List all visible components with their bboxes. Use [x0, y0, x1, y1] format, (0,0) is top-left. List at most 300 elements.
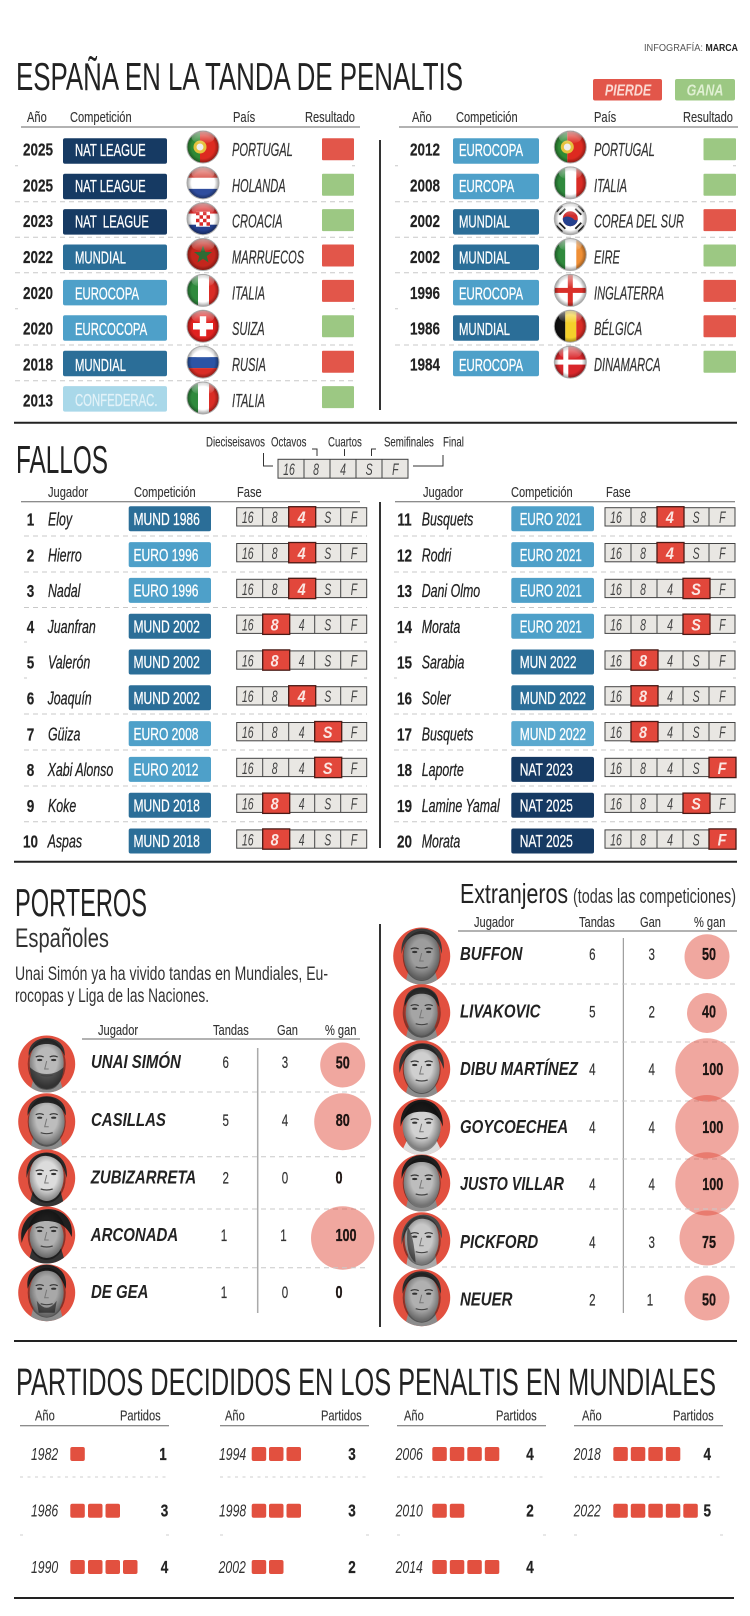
row: 2025 Portugal: [23, 131, 354, 164]
table header: Partidos: [120, 1407, 161, 1424]
row 2 Hierro: 2: [27, 547, 34, 566]
row 12 Rodri: EURO 2021: [520, 545, 582, 566]
row 11 Busquets: EURO 2021: [520, 510, 582, 530]
row: Zubizarreta: [18, 1150, 343, 1207]
row: Livakovic: 5: [589, 1004, 596, 1022]
row 7 Güiza: 7: [27, 726, 34, 745]
row 7 Güiza: Güiza: [48, 725, 81, 745]
phase key: 4: [340, 459, 346, 478]
row 2010: 2010: [395, 1501, 423, 1521]
row 4 Juanfran: MUND 2002: [134, 617, 200, 637]
row 3 Nadal: F: [351, 579, 358, 598]
row 12 Rodri: F: [719, 543, 727, 563]
row 18 Laporte: [397, 757, 736, 782]
row 1 Eloy: F: [351, 508, 358, 527]
credit: [644, 42, 738, 54]
row: Justo Villar: 100: [702, 1175, 723, 1195]
row 15 Sarabia: 15: [397, 654, 412, 673]
row 20 Morata: 8: [640, 830, 646, 849]
row 2 Hierro: Hierro: [48, 546, 82, 566]
row 16 Soler: 16: [397, 690, 412, 709]
row: Livakovic: [393, 984, 727, 1042]
row 9 Koke: [27, 793, 367, 818]
table header: Año: [582, 1407, 602, 1424]
table header: Resultado: [305, 108, 355, 125]
row: 2012 Portugal: [410, 131, 736, 164]
row: 2020 Italia: ITALIA: [232, 284, 265, 304]
row 4 Juanfran: F: [351, 615, 358, 634]
row 15 Sarabia: Sarabia: [422, 653, 465, 673]
row: Casillas: 5: [222, 1112, 229, 1131]
row: 2002 Eire: MUNDIAL: [459, 248, 510, 268]
row 6 Joaquín: 4: [297, 688, 306, 707]
row: 1996 Inglaterra: [410, 274, 736, 306]
table header: [20, 1407, 169, 1426]
phase key: [206, 434, 464, 478]
row 8 Xabi Alonso: 8: [27, 761, 34, 781]
row 16 Soler: 4: [667, 687, 673, 706]
row 10 Aspas: 4: [299, 830, 305, 849]
row 11 Busquets: F: [719, 508, 727, 527]
row 2 Hierro: 16: [242, 543, 254, 563]
row: 2002 Eire: EIRE: [594, 248, 621, 268]
row: Buffon: 6: [589, 946, 596, 965]
row: Arconada: 100: [336, 1226, 356, 1246]
row 5 Valerón: 4: [299, 651, 305, 670]
table header: Partidos: [321, 1407, 362, 1424]
row 2018: 4: [704, 1445, 711, 1465]
row 1 Eloy: 8: [272, 508, 278, 527]
row: Casillas: CASILLAS: [91, 1110, 167, 1130]
row: Casillas: 80: [336, 1111, 350, 1131]
row 2 Hierro: F: [351, 543, 358, 563]
row: 2023 Croacia: [23, 203, 354, 235]
row: 1984 Dinamarca: 1984: [410, 356, 440, 375]
row 6 Joaquín: MUND 2002: [134, 689, 200, 709]
row 15 Sarabia: F: [719, 651, 727, 670]
heading: Porteros: PORTEROS: [15, 882, 147, 925]
row 4 Juanfran: 4: [27, 618, 34, 637]
row 10 Aspas: F: [351, 830, 358, 849]
row: Unai Simón: 3: [282, 1054, 288, 1073]
row 10 Aspas: [23, 828, 367, 854]
row 7 Güiza: S: [323, 724, 333, 742]
row 16 Soler: S: [693, 687, 700, 706]
row: Justo Villar: JUSTO VILLAR: [460, 1173, 564, 1194]
table header: Año: [412, 108, 432, 125]
table header: Año: [27, 108, 47, 125]
row: Pickford: PICKFORD: [460, 1232, 538, 1252]
row: 1986 Bélgica: BÉLGICA: [594, 319, 642, 340]
row: Buffon: 3: [648, 946, 655, 965]
phase key: 16: [283, 459, 295, 478]
row 18 Laporte: S: [693, 758, 700, 777]
row: 2013 Italia: 2013: [23, 392, 53, 411]
phase key: 8: [313, 459, 319, 478]
row: 2020 Suiza: 2020: [23, 320, 53, 339]
table header: Competición: [511, 483, 573, 500]
row 14 Morata: S: [691, 617, 701, 635]
row: 2002 Eire: 2002: [410, 248, 440, 268]
row: Goycoechea: GOYCOECHEA: [460, 1117, 568, 1137]
row 10 Aspas: Aspas: [47, 832, 82, 852]
row: 2008 Italia: ITALIA: [594, 176, 627, 197]
row 11 Busquets: 4: [665, 509, 674, 528]
row 2010: [395, 1501, 534, 1521]
text block: Unai Simón: Unai Simón ya ha vivido tandas en Mundiales, Eu-: [15, 964, 328, 985]
phase key: Octavos: [271, 434, 306, 450]
row 2 Hierro: [27, 542, 367, 567]
row 17 Busquets: Busquets: [422, 725, 473, 745]
row 7 Güiza: 16: [242, 722, 254, 742]
row: 2002 Corea del Sur: [410, 203, 736, 235]
row 1998: [219, 1501, 356, 1521]
table header: Fase: [606, 483, 631, 500]
row 6 Joaquín: 8: [272, 687, 278, 706]
row 3 Nadal: 4: [297, 581, 306, 599]
row 2002: 2: [348, 1558, 356, 1578]
row: 2008 Italia: [410, 167, 736, 199]
row 8 Xabi Alonso: 16: [242, 758, 254, 777]
row 1990: [31, 1558, 168, 1578]
row: Livakovic: LIVAKOVIC: [460, 1001, 541, 1022]
row 15 Sarabia: MUN 2022: [520, 653, 576, 673]
row: 1986 Bélgica: MUNDIAL: [459, 320, 510, 340]
table header: Tandas: [579, 913, 615, 930]
row 2022: 5: [704, 1502, 711, 1521]
row 9 Koke: Koke: [48, 797, 76, 817]
row 7 Güiza: F: [351, 722, 358, 742]
row: 1996 Inglaterra: EUROCOPA: [459, 284, 523, 304]
row 1 Eloy: Eloy: [48, 510, 73, 530]
row 14 Morata: F: [719, 615, 727, 634]
row: 2025 Holanda: HOLANDA: [232, 176, 286, 197]
row 4 Juanfran: 8: [271, 617, 279, 635]
row: 2020 Italia: 2020: [23, 284, 53, 303]
credit: MARCA: [705, 42, 738, 54]
row 9 Koke: 9: [27, 797, 34, 816]
row 1 Eloy: MUND 1986: [134, 510, 200, 530]
row 18 Laporte: Laporte: [422, 761, 464, 781]
table header: Jugador: [48, 483, 89, 500]
row 13 Dani Olmo: Dani Olmo: [422, 582, 480, 602]
row 2 Hierro: 4: [297, 545, 306, 563]
row: 1984 Dinamarca: DINAMARCA: [594, 355, 661, 376]
table header: Gan: [277, 1021, 298, 1038]
row 2006: [395, 1445, 534, 1465]
row 2022: 2022: [573, 1501, 601, 1521]
row 11 Busquets: S: [693, 508, 700, 527]
row 2006: 2006: [395, 1445, 423, 1465]
row 17 Busquets: F: [719, 722, 727, 742]
row: Neuer: 1: [647, 1292, 653, 1310]
table header: País: [594, 108, 617, 125]
table header: % gan: [694, 913, 725, 930]
row 5 Valerón: [27, 650, 367, 674]
row 19 Lamine Yamal: S: [691, 796, 701, 814]
row 16 Soler: [397, 685, 735, 710]
row 2010: 2: [526, 1502, 534, 1521]
table header: Partidos: [496, 1407, 537, 1424]
row 11 Busquets: 11: [397, 511, 412, 530]
row 2006: 4: [526, 1445, 534, 1465]
row 11 Busquets: 16: [610, 508, 622, 527]
row 17 Busquets: 17: [397, 726, 412, 745]
table header: Año: [225, 1407, 245, 1424]
table header: Jugador: [98, 1021, 139, 1038]
row: Justo Villar: 4: [648, 1176, 655, 1195]
row: Zubizarreta: 0: [282, 1169, 288, 1188]
row 5 Valerón: Valerón: [48, 653, 90, 673]
heading: Fallos: FALLOS: [16, 439, 108, 482]
row: 1984 Dinamarca: EUROCOPA: [459, 356, 523, 376]
row 10 Aspas: S: [324, 830, 332, 849]
table header: [399, 108, 738, 127]
row 1982: [31, 1445, 167, 1465]
panel: results table right: [395, 108, 738, 378]
row: 1986 Bélgica: [410, 310, 736, 342]
table header: Partidos: [673, 1407, 714, 1424]
row 10 Aspas: 16: [242, 830, 254, 849]
row: 2022 Marruecos: MUNDIAL: [75, 248, 126, 268]
row: Unai Simón: UNAI SIMÓN: [91, 1052, 182, 1072]
row: 2022 Marruecos: [23, 239, 354, 271]
row 1990: 1990: [31, 1558, 59, 1578]
portrait: [393, 984, 450, 1042]
row: Casillas: 4: [282, 1112, 288, 1131]
panel: porteros españoles: [18, 1021, 374, 1322]
row 17 Busquets: 8: [639, 724, 647, 742]
portrait: [393, 1212, 450, 1270]
row 14 Morata: EURO 2021: [520, 617, 582, 637]
row 2014: [395, 1558, 534, 1578]
row: 2013 Italia: ITALIA: [232, 391, 265, 412]
row 9 Koke: S: [324, 794, 332, 813]
row 2022: [573, 1501, 711, 1521]
table header: Año: [35, 1407, 55, 1424]
row: 2025 Holanda: [23, 167, 354, 199]
row: Pickford: 4: [589, 1234, 596, 1253]
row 7 Güiza: 8: [272, 722, 278, 742]
row 12 Rodri: 16: [610, 543, 622, 563]
row: Goycoechea: 4: [589, 1119, 596, 1138]
row: 2025 Portugal: PORTUGAL: [232, 140, 293, 161]
heading: Extranjeros: Extranjeros: [460, 878, 568, 909]
row: 1996 Inglaterra: INGLATERRA: [594, 284, 664, 304]
table header: Jugador: [423, 483, 464, 500]
row: 2023 Croacia: NAT LEAGUE: [75, 212, 149, 232]
row 2018: [573, 1445, 711, 1465]
row: Neuer: NEUER: [460, 1289, 513, 1310]
row: Neuer: 2: [589, 1292, 596, 1310]
table header: [21, 108, 360, 127]
table header: País: [233, 108, 256, 125]
row 2 Hierro: 8: [272, 543, 278, 563]
row 1 Eloy: 16: [242, 508, 254, 527]
row 13 Dani Olmo: 8: [640, 579, 646, 598]
row: 2023 Croacia: CROACIA: [232, 212, 283, 233]
row 16 Soler: MUND 2022: [520, 689, 586, 709]
table header: [574, 1407, 723, 1426]
row 11 Busquets: 8: [640, 508, 646, 527]
table header: Jugador: [474, 913, 515, 930]
row: De Gea: DE GEA: [91, 1282, 148, 1302]
table header: Resultado: [683, 108, 733, 125]
row 1994: 3: [348, 1445, 356, 1465]
panel: partidos col 1: [20, 1407, 169, 1578]
phase key: S: [366, 459, 373, 478]
row: 2018 Rusia: [23, 346, 354, 378]
portrait: [18, 1150, 75, 1207]
row 3 Nadal: 8: [272, 579, 278, 598]
row: Unai Simón: 6: [222, 1054, 229, 1073]
table header: Año: [404, 1407, 424, 1424]
row 3 Nadal: Nadal: [48, 582, 81, 602]
row 16 Soler: 8: [639, 688, 647, 707]
table header: [397, 1407, 546, 1426]
row: Zubizarreta: 2: [222, 1169, 229, 1188]
panel: results table left: [15, 108, 360, 414]
row: 2002 Corea del Sur: MUNDIAL: [459, 212, 510, 232]
table header: [21, 483, 360, 502]
row 5 Valerón: 16: [242, 651, 254, 670]
row: Buffon: BUFFON: [460, 944, 523, 964]
row 4 Juanfran: Juanfran: [47, 618, 96, 638]
row 4 Juanfran: S: [324, 615, 332, 634]
row 20 Morata: 4: [667, 830, 673, 849]
row: 2020 Italia: EUROCOPA: [75, 284, 139, 304]
row: Zubizarreta: 0: [335, 1168, 343, 1188]
row 9 Koke: 16: [242, 794, 254, 813]
portrait: [393, 1269, 450, 1327]
row 20 Morata: NAT 2025: [520, 832, 573, 852]
row: 2002 Eire: [410, 239, 736, 271]
row 6 Joaquín: Joaquín: [47, 689, 92, 709]
row: 2012 Portugal: EUROCOPA: [459, 140, 523, 161]
row: 2020 Suiza: [23, 310, 354, 342]
row 1 Eloy: S: [324, 508, 332, 527]
row 19 Lamine Yamal: 19: [397, 797, 412, 816]
row 4 Juanfran: 4: [299, 615, 305, 634]
row 11 Busquets: [397, 506, 735, 531]
row: Goycoechea: [393, 1095, 739, 1158]
text block: Unai Simón: [15, 964, 328, 1007]
row 16 Soler: Soler: [422, 689, 451, 709]
row: Arconada: 1: [221, 1227, 227, 1246]
table header: [82, 1021, 360, 1039]
row 8 Xabi Alonso: 8: [272, 758, 278, 777]
row: 2012 Portugal: PORTUGAL: [594, 140, 655, 161]
row 14 Morata: 14: [397, 618, 412, 637]
phase key: F: [392, 459, 400, 478]
legend: PIERDE: [605, 82, 652, 100]
panel: partidos col 2: [218, 1407, 369, 1578]
row 1998: 3: [348, 1502, 356, 1521]
row 6 Joaquín: F: [351, 687, 358, 706]
row 5 Valerón: S: [324, 651, 332, 670]
panel: partidos col 3: [395, 1407, 546, 1578]
row 9 Koke: 8: [271, 796, 279, 814]
row 15 Sarabia: S: [693, 651, 700, 670]
row: Goycoechea: 100: [702, 1118, 723, 1138]
row 14 Morata: [397, 614, 735, 639]
row: Dibu Martínez: 4: [589, 1061, 596, 1080]
row: Arconada: ARCONADA: [90, 1225, 178, 1245]
row: Neuer: 50: [702, 1291, 716, 1310]
portrait: [393, 1098, 450, 1156]
row 19 Lamine Yamal: [397, 793, 735, 818]
row: 2025 Portugal: 2025: [23, 141, 53, 160]
phase key: Final: [443, 434, 464, 450]
row 2 Hierro: S: [324, 543, 332, 563]
row 12 Rodri: S: [693, 543, 700, 563]
portrait: [18, 1036, 75, 1093]
row 12 Rodri: [397, 542, 735, 567]
row: De Gea: 1: [221, 1284, 227, 1303]
row: Pickford: [393, 1210, 734, 1270]
row 15 Sarabia: 8: [639, 652, 647, 671]
row: Unai Simón: 50: [336, 1053, 350, 1073]
table header: [395, 483, 735, 502]
phase key: Dieciseisavos: [206, 434, 265, 450]
row 13 Dani Olmo: 4: [667, 579, 673, 598]
row: Dibu Martínez: DIBU MARTÍNEZ: [460, 1059, 579, 1079]
row 9 Koke: MUND 2018: [134, 796, 200, 816]
row 5 Valerón: 5: [27, 654, 34, 673]
row: 2020 Italia: [23, 274, 354, 306]
row 18 Laporte: F: [718, 760, 727, 778]
row 20 Morata: [397, 828, 736, 854]
row 15 Sarabia: [397, 650, 735, 674]
row 15 Sarabia: 4: [667, 651, 673, 670]
row 3 Nadal: [27, 578, 367, 603]
row 19 Lamine Yamal: F: [719, 794, 727, 813]
row 16 Soler: F: [719, 687, 727, 706]
row: 2013 Italia: CONFEDERAC.: [75, 390, 157, 411]
row 3 Nadal: 3: [27, 582, 34, 602]
row 17 Busquets: S: [693, 722, 700, 742]
row 16 Soler: 16: [610, 687, 622, 706]
portrait: [18, 1093, 75, 1151]
row: Unai Simón: [18, 1036, 365, 1093]
row 6 Joaquín: [27, 685, 367, 710]
row 12 Rodri: 8: [640, 543, 646, 563]
legend: [593, 79, 735, 100]
row 8 Xabi Alonso: EURO 2012: [134, 760, 198, 780]
row: Buffon: [393, 928, 730, 985]
row: 2018 Rusia: RUSIA: [232, 355, 266, 376]
row 1 Eloy: 1: [27, 511, 34, 530]
panel: fallos right: [394, 483, 736, 854]
row: 2013 Italia: [23, 382, 354, 414]
heading: Extranjeros: [460, 878, 736, 909]
row: Casillas: [18, 1093, 371, 1151]
row 19 Lamine Yamal: Lamine Yamal: [422, 797, 500, 817]
row 1986: 3: [161, 1502, 168, 1521]
row 10 Aspas: 8: [271, 831, 279, 850]
row 8 Xabi Alonso: S: [323, 760, 333, 778]
row: Pickford: 75: [702, 1233, 716, 1253]
row 18 Laporte: 8: [640, 758, 646, 777]
row: Buffon: 50: [702, 945, 716, 965]
table header: Competición: [134, 483, 196, 500]
panel: partidos col 4: [573, 1407, 723, 1535]
row 2014: 4: [526, 1558, 534, 1578]
title: ESPAÑA EN LA TANDA DE PENALTIS: [16, 56, 463, 99]
portrait: [18, 1206, 75, 1264]
text block: Unai Simón: rocopas y Liga de las Naciones.: [15, 986, 209, 1007]
row 15 Sarabia: 16: [610, 651, 622, 670]
